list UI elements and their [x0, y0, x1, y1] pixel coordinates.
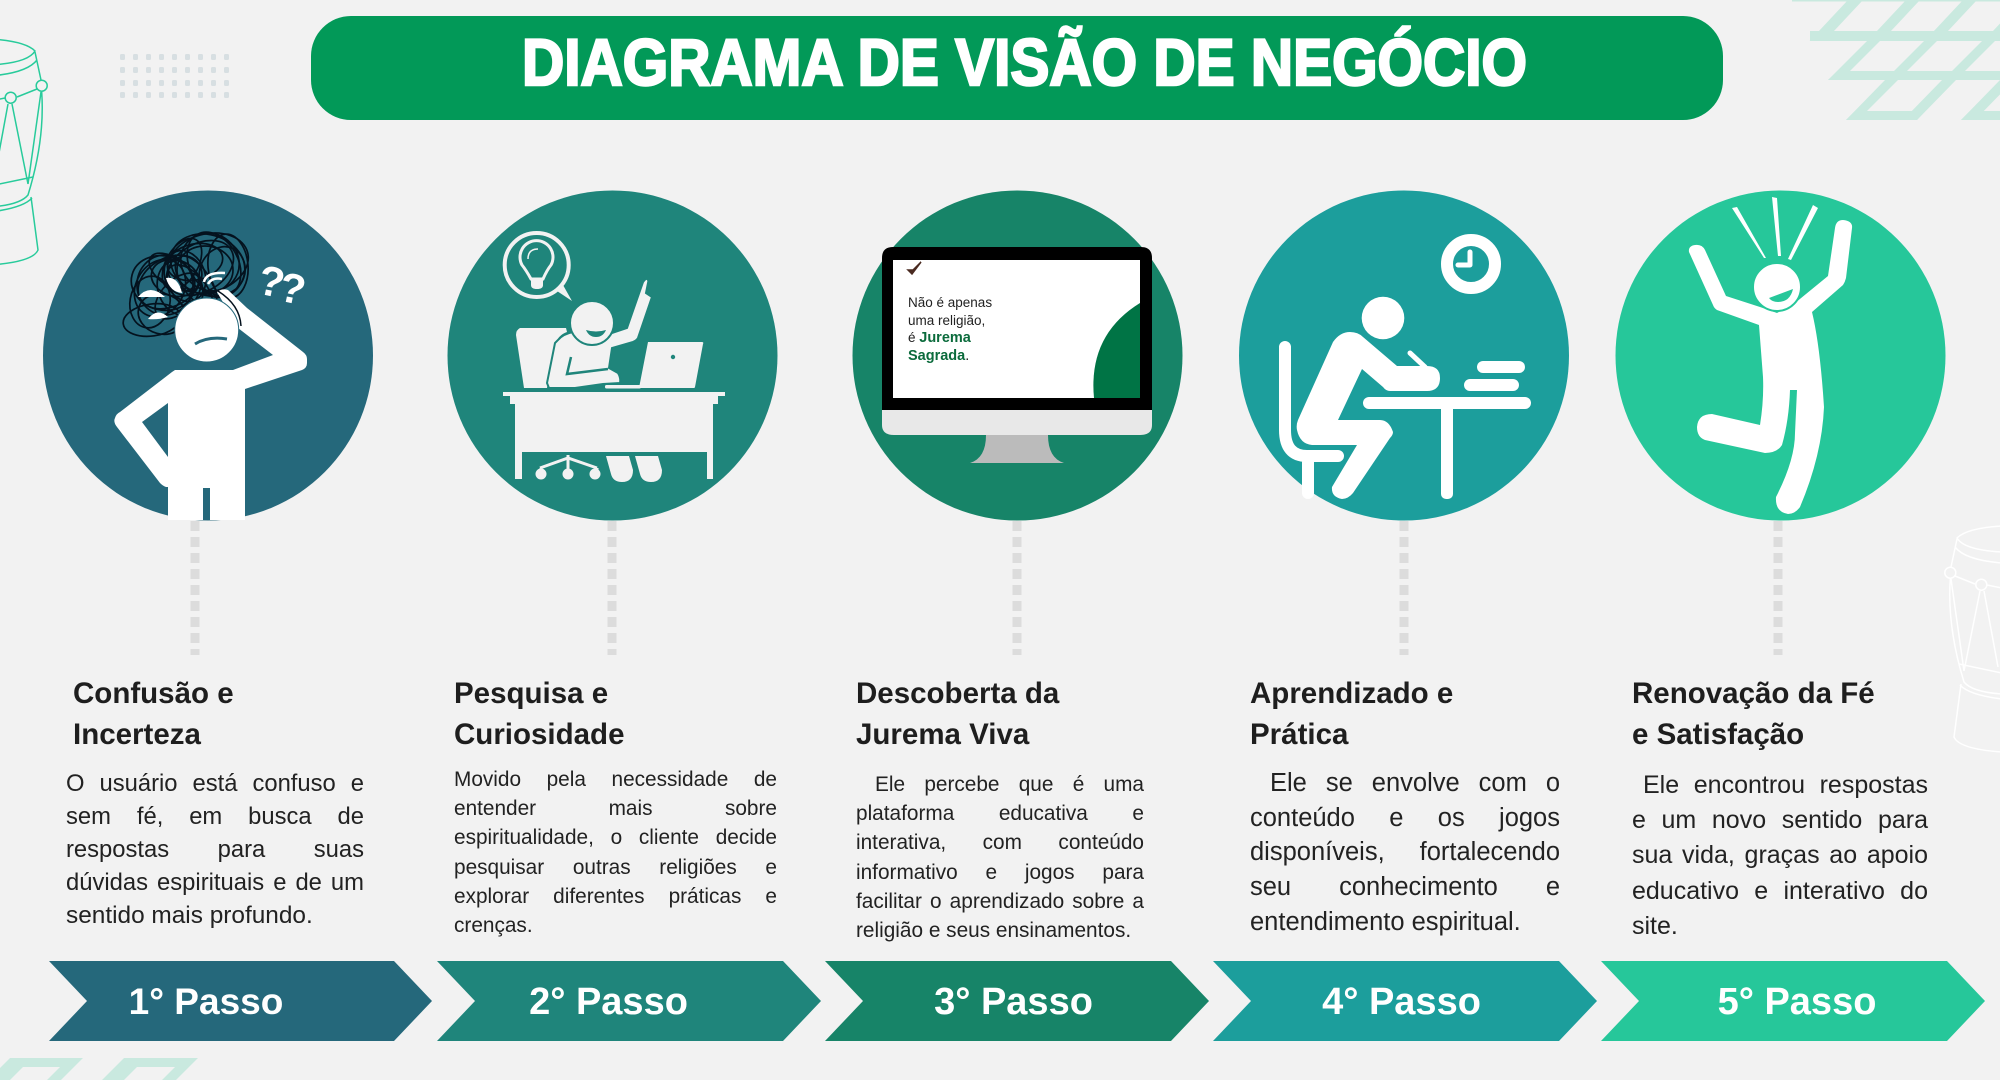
step arrow 2: 2° Passo	[529, 981, 688, 1023]
decorative grid top right	[1792, 0, 2000, 120]
heading: step 5: e Satisfação	[1632, 718, 1804, 751]
icon: confused person in circle: ??	[254, 256, 310, 314]
text: step 2: pesquisar outras religiões e	[454, 856, 777, 879]
step arrow 2	[437, 961, 821, 1041]
drum outline bottom right	[1945, 526, 2000, 752]
connector 3	[1012, 521, 1022, 655]
step arrow 3	[825, 961, 1209, 1041]
icon: person at desk with idea in circle	[448, 190, 778, 520]
text: step 3	[856, 773, 1144, 942]
text: step 4	[1250, 769, 1560, 936]
connector 1	[190, 521, 200, 655]
text: step 3: plataforma educativa e	[856, 802, 1144, 825]
drum outline top left	[0, 39, 47, 265]
icon: desktop monitor with Jurema Sagrada screen in circle: Não é apenas	[908, 295, 992, 310]
heading: step 4: Aprendizado e	[1250, 677, 1453, 710]
text: step 4: seu conhecimento e	[1250, 873, 1560, 901]
text: step 4: disponíveis, fortalecendo	[1250, 838, 1560, 866]
heading: step 3	[856, 677, 1060, 751]
text: step 3: interativa, com conteúdo	[856, 831, 1144, 854]
connector 4	[1400, 521, 1408, 655]
heading: step 2	[454, 677, 624, 751]
heading: step 1: Confusão e	[73, 677, 234, 710]
heading: step 4	[1250, 677, 1453, 751]
heading: step 2: Pesquisa e	[454, 677, 608, 710]
text: step 3: Ele percebe que é uma	[875, 773, 1144, 796]
text: step 3: religião e seus ensinamentos.	[856, 919, 1131, 942]
title banner: DIAGRAMA DE VISÃO DE NEGÓCIO	[522, 25, 1527, 99]
icon: person studying at table in circle	[1239, 190, 1569, 520]
text: step 1: sentido mais profundo.	[66, 902, 313, 929]
icon: desktop monitor with Jurema Sagrada screen in circle	[852, 190, 1182, 520]
text: step 1: sem fé, em busca de	[66, 803, 364, 830]
heading: step 3: Jurema Viva	[856, 718, 1029, 751]
heading: step 1	[73, 677, 234, 751]
decorative dot grid	[120, 54, 229, 98]
text: step 3: facilitar o aprendizado sobre a	[856, 890, 1144, 913]
text: step 2: explorar diferentes práticas e	[454, 885, 777, 908]
text: step 1: respostas para suas	[66, 836, 364, 863]
icon: joyful jumping person in circle	[1616, 190, 1946, 520]
text: step 4: entendimento espiritual.	[1250, 908, 1521, 936]
text: step 5: site.	[1632, 912, 1678, 940]
connector 2	[608, 521, 616, 655]
text: step 1	[66, 770, 364, 929]
text: step 1: dúvidas espirituais e de um	[66, 869, 364, 896]
heading: step 5	[1632, 677, 1875, 751]
step arrow 5	[1601, 961, 1985, 1041]
step arrow 4: 4° Passo	[1322, 981, 1481, 1023]
text: step 5: sua vida, graças ao apoio	[1632, 841, 1928, 869]
text: step 4: Ele se envolve com o	[1270, 769, 1560, 797]
icon: desktop monitor with Jurema Sagrada screen in circle: Sagrada.	[908, 348, 969, 364]
text: step 2: espiritualidade, o cliente decide	[454, 826, 777, 849]
decorative grid bottom left	[0, 1058, 198, 1080]
text: step 1: O usuário está confuso e	[66, 770, 364, 797]
text: step 5: Ele encontrou respostas	[1643, 771, 1928, 799]
title banner	[311, 16, 1723, 120]
text: step 3: informativo e jogos para	[856, 861, 1144, 884]
heading: step 2: Curiosidade	[454, 718, 624, 751]
heading: step 4: Prática	[1250, 718, 1348, 751]
step arrow 1	[49, 961, 432, 1041]
step arrow 1: 1° Passo	[129, 981, 283, 1022]
heading: step 3: Descoberta da	[856, 677, 1059, 710]
icon: desktop monitor with Jurema Sagrada screen in circle: uma religião,	[908, 313, 985, 328]
step arrow 5: 5° Passo	[1718, 981, 1876, 1023]
step arrow 3: 3° Passo	[934, 981, 1093, 1023]
heading: step 5: Renovação da Fé	[1632, 677, 1875, 710]
connector 5	[1774, 521, 1782, 655]
heading: step 1: Incerteza	[73, 718, 201, 751]
icon: confused person in circle	[43, 190, 373, 520]
text: step 5	[1632, 771, 1928, 940]
text: step 5: educativo e interativo do	[1632, 877, 1928, 905]
text: step 4: conteúdo e os jogos	[1250, 804, 1560, 832]
text: step 2: crenças.	[454, 914, 533, 937]
text: step 2: entender mais sobre	[454, 797, 777, 820]
icon: desktop monitor with Jurema Sagrada screen in circle: é Jurema	[908, 330, 971, 346]
text: step 2	[454, 768, 777, 937]
step arrow 4	[1213, 961, 1597, 1041]
text: step 2: Movido pela necessidade de	[454, 768, 777, 791]
text: step 5: e um novo sentido para	[1632, 806, 1928, 834]
